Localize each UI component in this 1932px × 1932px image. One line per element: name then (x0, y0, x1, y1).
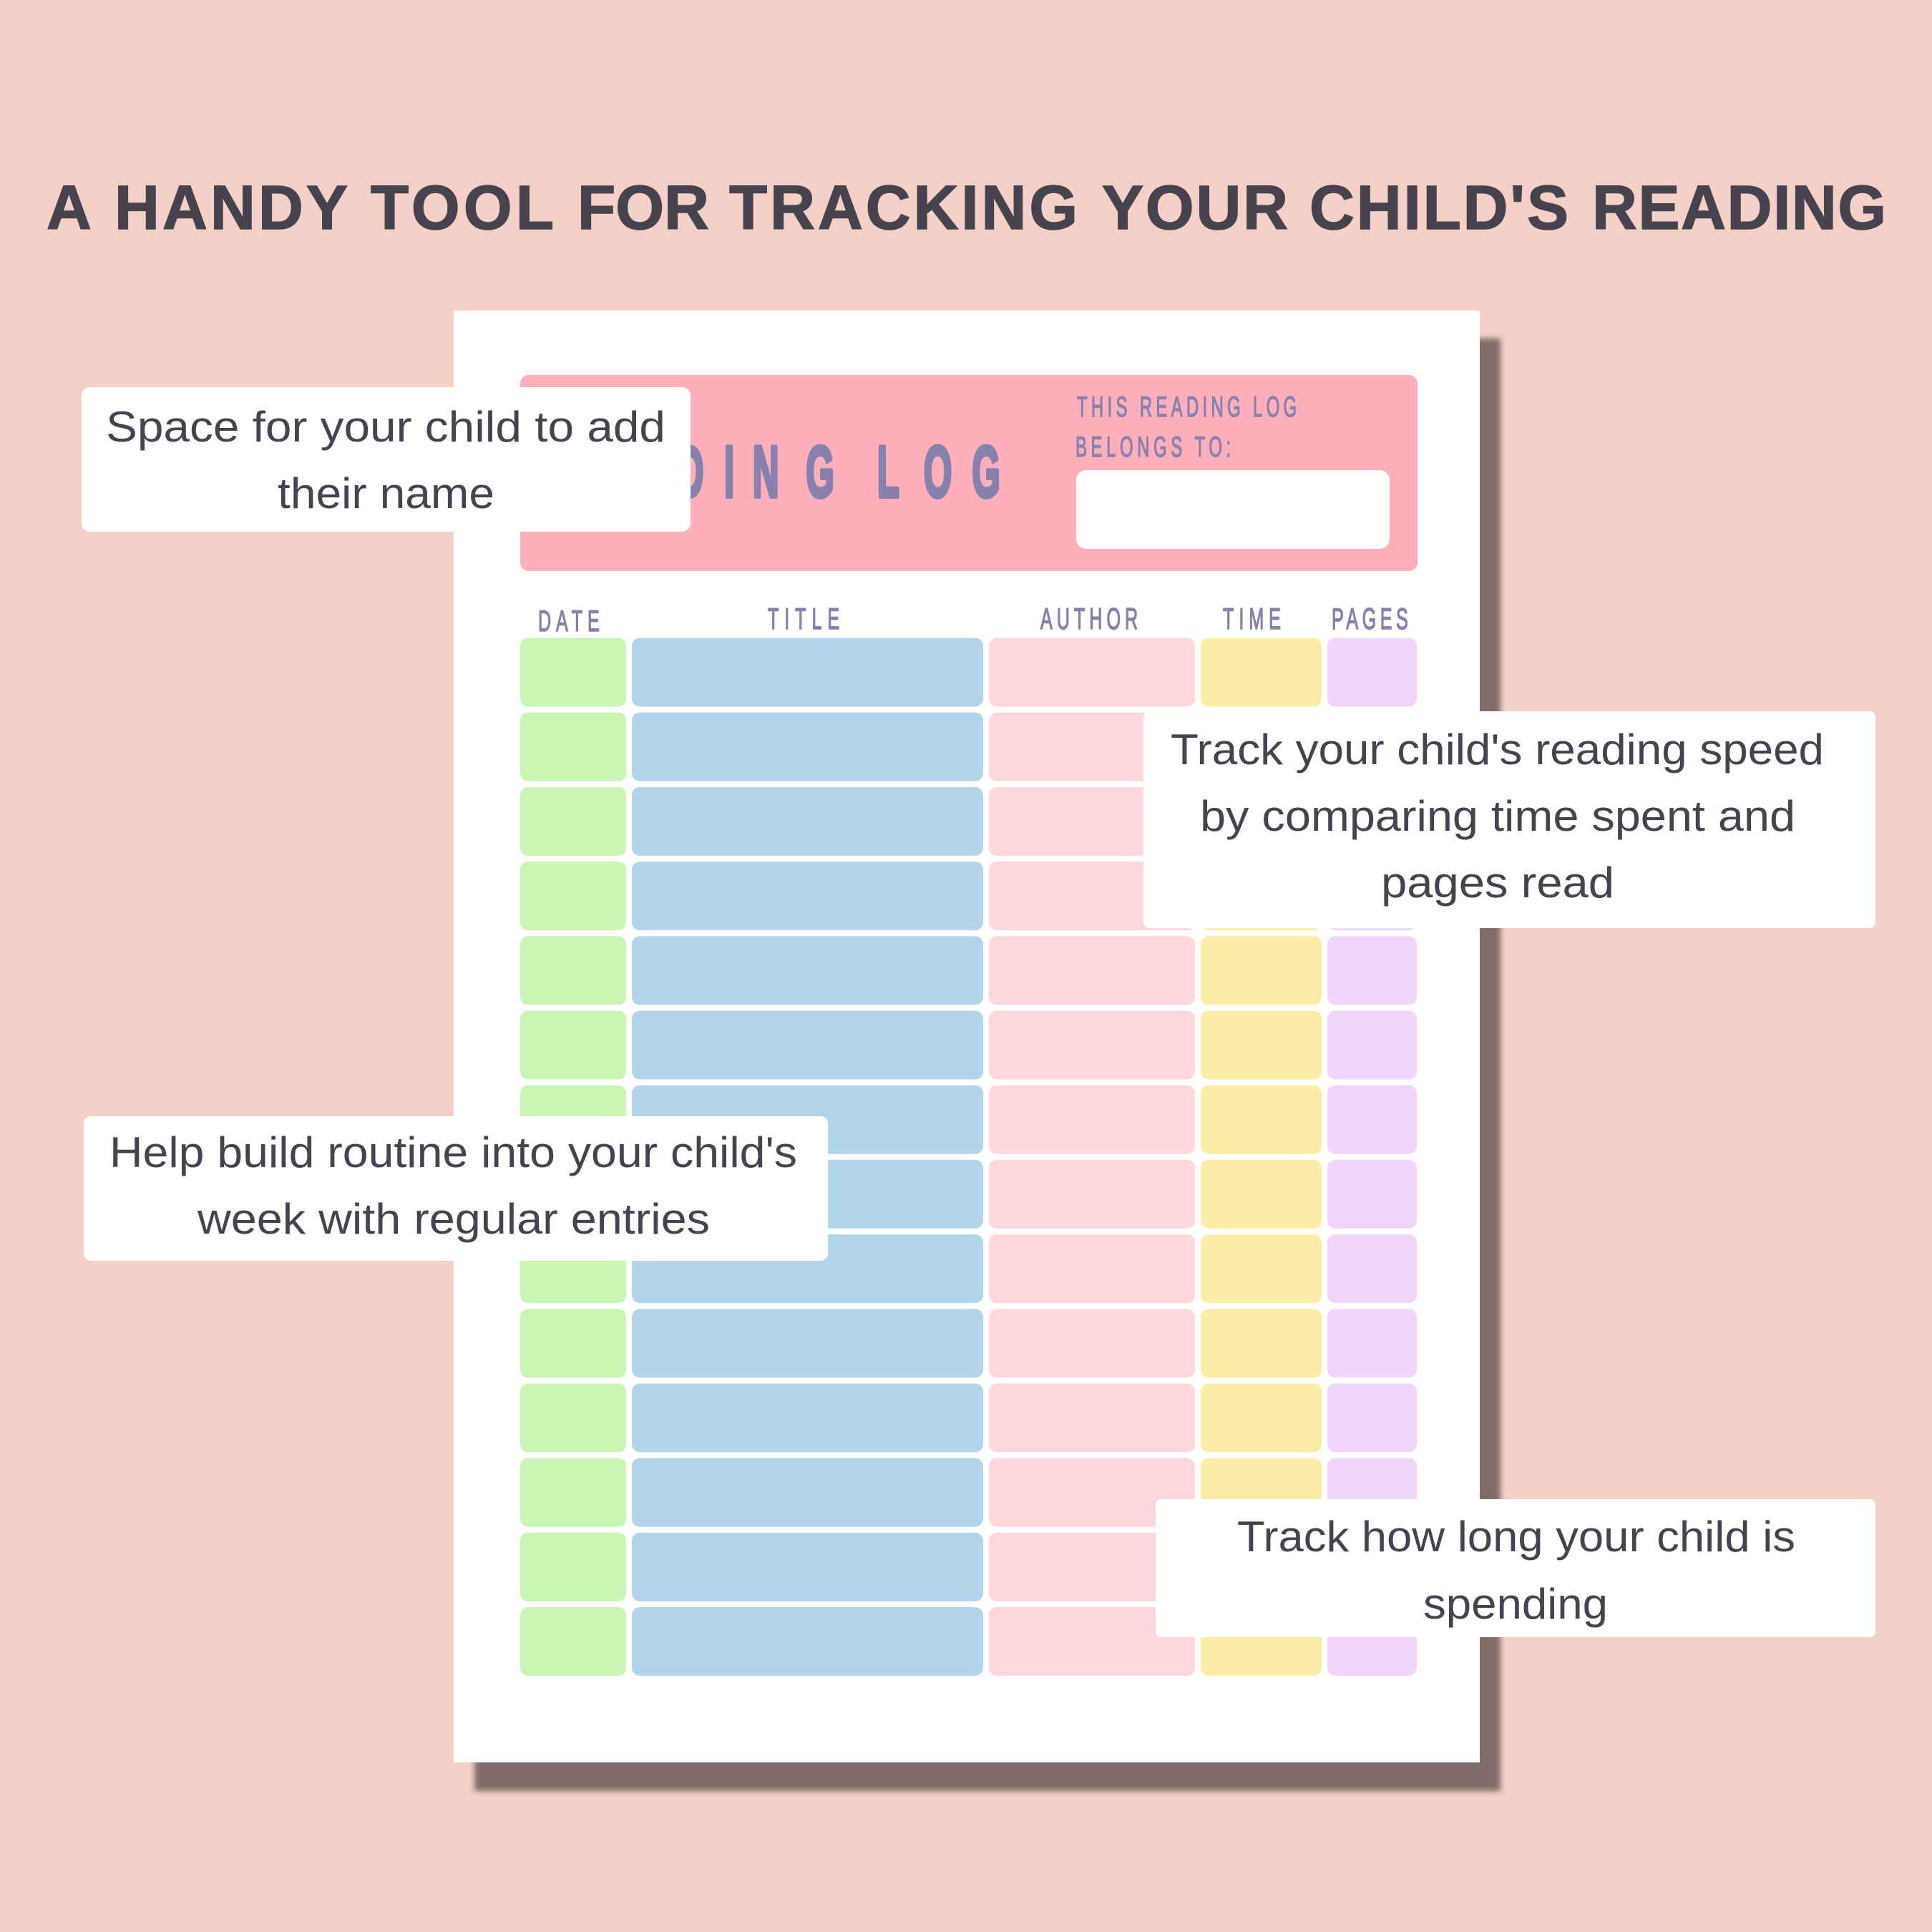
column headings: TIME (1223, 603, 1281, 636)
name entry box (1076, 470, 1390, 549)
title: FOR (577, 173, 709, 243)
row 2 (520, 713, 1417, 781)
row 13 (520, 1533, 1417, 1601)
title (47, 173, 1886, 243)
callout: build routine: week with regular entries (197, 1195, 710, 1243)
callout: time spent: spending (1423, 1580, 1608, 1628)
title: HANDY (114, 173, 348, 243)
label: this reading log belongs to: BELONGS TO: (1075, 431, 1231, 462)
title: READING (1592, 173, 1886, 243)
row 14 (520, 1607, 1417, 1676)
row 12 (520, 1458, 1417, 1527)
callout: reading speed: Track your child's reading speed (1171, 726, 1824, 774)
column headings: AUTHOR (1040, 603, 1138, 636)
worksheet page (454, 311, 1480, 1762)
column headings: PAGES (1332, 603, 1408, 636)
log table (520, 638, 1417, 1676)
label: this reading log belongs to: THIS READING LOG (1077, 391, 1297, 422)
column headings (538, 603, 1408, 638)
row 5 (520, 936, 1417, 1005)
heading: reading log: READING LOG (537, 431, 1000, 512)
title: A (47, 173, 92, 243)
title: TOOL (371, 173, 554, 243)
row 6 (520, 1010, 1417, 1079)
row 9 (520, 1234, 1417, 1303)
panel: reading log worksheet (454, 311, 1501, 1791)
callout: build routine: Help build routine into your child's (109, 1128, 797, 1176)
callout: space for name (82, 387, 691, 532)
title: YOUR (1102, 173, 1288, 243)
title: CHILD'S (1309, 173, 1568, 243)
worksheet drop shadow (474, 338, 1501, 1791)
row 10 (520, 1309, 1417, 1377)
header banner (520, 375, 1418, 571)
callout: time spent (1156, 1499, 1875, 1637)
callout: space for name: Space for your child to add (106, 403, 665, 451)
row 11 (520, 1384, 1417, 1453)
label: this reading log belongs to (1075, 391, 1297, 462)
row 7 (520, 1085, 1417, 1154)
row 8 (520, 1160, 1417, 1229)
callout: time spent: Track how long your child is (1237, 1513, 1795, 1561)
callout: reading speed (1143, 711, 1875, 928)
callout: build routine (84, 1116, 828, 1261)
row 1 (520, 638, 1417, 707)
callout: reading speed: by comparing time spent and (1200, 792, 1795, 840)
column headings: DATE (538, 605, 600, 638)
row 3 (520, 787, 1417, 856)
row 4 (520, 862, 1417, 930)
column headings: TITLE (768, 603, 839, 636)
title: TRACKING (729, 173, 1078, 243)
callout: space for name: their name (278, 469, 494, 517)
callout: reading speed: pages read (1381, 859, 1614, 907)
